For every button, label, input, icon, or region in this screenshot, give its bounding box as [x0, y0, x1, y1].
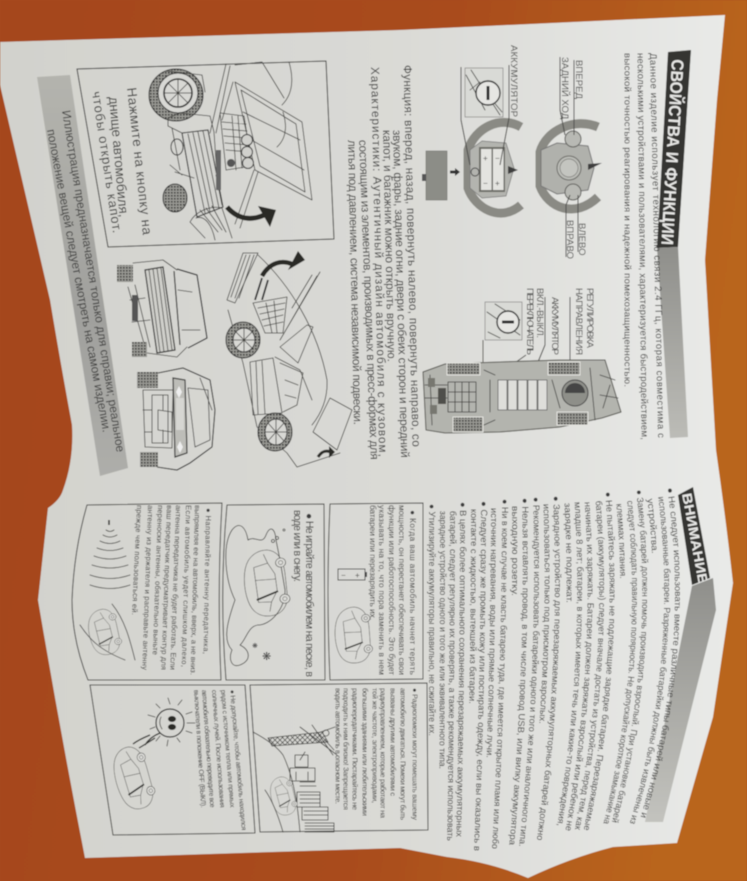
icon: battery — [338, 569, 367, 580]
icon: snowflakes — [252, 529, 285, 663]
main functions and characteristics text: капот, и багажник можно открыть вручную. — [380, 130, 399, 362]
diagram: controller battery compartment: + — [495, 179, 500, 188]
panel text: ● Направляйте антенну передатчика, — [201, 508, 213, 654]
label: battery: АККУМУЛЯТОР — [508, 45, 519, 117]
labels: car underside controls — [512, 288, 595, 365]
warning heading: ВНИМАНИЕ — [679, 492, 711, 585]
panel text: переноски антенны, обязательно выньте — [151, 505, 165, 655]
panel text: автомобилю двигаться. Помехи могут быть — [398, 688, 408, 820]
panel text: той же частоте, электроприводами, — [370, 688, 380, 803]
heading grey extension bar — [657, 247, 688, 438]
warning list text: использоваться только под присмотром взрослых. — [539, 504, 550, 724]
intro paragraph: Данное изделие использует технологию связи 2.4 ГГц, которая совместима с — [647, 53, 666, 438]
arrows: sun rays — [133, 733, 160, 748]
warning list text: клеммах питания. — [616, 504, 626, 578]
labels: left and right — [564, 195, 587, 259]
inset: car power switch — [483, 302, 522, 362]
warning list text: ● Ни в коем случае не класть батарею туда, где имеется открытое пламя или любой — [492, 499, 509, 849]
icon: car — [332, 605, 374, 665]
panel text: антенну из держателя и расправьте антенну — [140, 505, 155, 670]
warning list text: ● Замену батарей должен помочь производить взрослый. При установке батарей — [612, 490, 649, 824]
panel text: воде или в снегу. — [291, 510, 303, 582]
panel: keep away from heat and sun — [90, 685, 255, 835]
panel text — [291, 510, 315, 677]
intro paragraph: несколькими устройствами и пользователями, характеризуется быстродействием, — [635, 53, 650, 440]
heading: features and functions: СВОЙСТВА И ФУНКЦИИ — [657, 59, 687, 246]
icon: radio waves — [90, 520, 130, 588]
panel text: выпрямляя ее на автомобиль, вверх, а не вниз. — [189, 505, 202, 675]
labels: car underside controls: ВКЛ.-ВЫКЛ. — [534, 288, 545, 338]
panel: do not play on sand water snow — [223, 504, 325, 680]
panel text — [130, 505, 213, 675]
diagram: controller battery compartment: − — [483, 179, 488, 188]
labels: car underside controls: РЕГУЛИРОВКА — [584, 288, 595, 349]
main functions and characteristics text: звуком, фары, задние огни, двери с обеих сторон и передний — [390, 130, 412, 458]
car in puddle — [240, 547, 293, 619]
warning list text: начинать их заряжать. Батареи должен заряжать взрослый или ребенок не — [565, 502, 594, 832]
diagram: car underside with batteries — [423, 360, 621, 433]
hand drawing — [190, 206, 232, 240]
main functions and characteristics text: Характеристики: Аутентичный дизайн автомобиля с кузовом, — [368, 67, 390, 457]
main functions and characteristics text — [345, 65, 424, 460]
panel text: выключатели в положение OFF (ВЫКЛ). — [192, 690, 206, 808]
diagram: controller battery compartment: − — [495, 154, 500, 163]
panel text: ● Радиопомехи могут помешать вашему — [410, 688, 420, 820]
warning list text: устройства. — [645, 498, 658, 554]
instruction text: днище автомобиля, — [106, 96, 132, 218]
warning list text: ● Не следует использовать вместе различные типы батарей или новые и — [640, 488, 680, 818]
arrow: trunk lifted — [318, 446, 335, 458]
warning list text: зарядке не подлежат. — [562, 502, 572, 602]
panel: battery replacement warning — [328, 503, 423, 680]
engine parts — [216, 113, 254, 190]
panel text — [368, 505, 418, 675]
icon: transmission tower — [268, 725, 337, 755]
warning list text: зарядное устройство одного и того же или эквивалентного типа. — [438, 510, 448, 769]
icon: snowflakes: ❋ — [262, 651, 271, 663]
diagram: car with hood doors and trunk open — [226, 251, 352, 467]
labels: car underside controls: ПЕРЕКЛЮЧАТЕЛЬ — [524, 288, 535, 355]
arrow: lift hood — [227, 206, 276, 227]
panel text: автомобиля обязательно переведите все — [200, 690, 216, 808]
open hood and engine drawing — [168, 62, 312, 228]
warning list text: батареи (аккумуляторы) следует вначале достать из устройства, перед тем, как — [574, 500, 606, 830]
labels: forward and reverse — [559, 57, 584, 135]
warning list text: ● В целях более оптимального сохранения перезаряжаемых аккумуляторных — [454, 502, 467, 837]
icon: city buildings — [290, 752, 334, 832]
warning list text: выходную розетку. — [510, 506, 518, 596]
panel text: прежде чем пользоваться ей. — [130, 505, 144, 615]
panel text: указывать на то, что пора заменить в нем — [377, 505, 387, 675]
icon: battery: − — [341, 571, 346, 580]
panel text: ● Когда ваш автомобиль начнет терять — [408, 510, 418, 675]
panel text: ваш передатчик предусматривает контур для — [159, 505, 174, 670]
warning list text: младше 8 лет; батареи, в которых имеется течь или какие-то повреждения, — [556, 502, 584, 826]
panel text: солнечных лучей. После использования — [210, 690, 226, 808]
main functions and characteristics text: состоящим из элементов, производимых в пресс-формах для — [356, 140, 382, 460]
labels: car underside controls: АККУМУЛЯТОР — [549, 297, 560, 355]
labels: left and right: ВЛЕВО — [576, 223, 587, 256]
wheel drawing — [149, 69, 205, 121]
panel text — [334, 688, 420, 820]
warning list text: ● Зарядное устройство для перезаряжаемых аккумуляторных батарей должно — [536, 496, 562, 840]
panel: antenna direction — [72, 503, 222, 680]
puddle outline — [226, 525, 285, 666]
panel text: рядом с источником тепла или прямых — [219, 690, 235, 808]
instruction text — [89, 87, 155, 236]
main functions and characteristics text: литья под давлением, система независимой подвески. — [345, 140, 365, 425]
battery cover with arrow — [422, 151, 460, 200]
diagram: controller battery compartment — [468, 122, 521, 213]
ground curve — [253, 732, 300, 832]
warning heading grey extension bar — [645, 578, 716, 822]
arrow: hood lifted — [262, 251, 305, 276]
panel text: вызваны другими автомобилями с — [388, 688, 398, 796]
panel text: радиопередатчиками. Постарайтесь не — [350, 688, 360, 810]
label: battery — [500, 45, 519, 165]
panel text: функции или работоспособность. Это будет — [387, 505, 397, 675]
car on road — [84, 606, 125, 658]
labels: forward and reverse: ЗАДНИЙ ХОД — [559, 57, 571, 120]
labels: left and right: ВПРАВО — [564, 220, 575, 259]
main functions and characteristics text: Функция: вперед, назад, повернуть налево, повернуть направо, со — [401, 65, 424, 447]
car near tower — [266, 774, 300, 818]
warning list text: следует соблюдать правильную полярность. Не допускайте короткое замыкание на — [603, 500, 638, 824]
panel text: ● Не допускайте, чтобы автомобиль находился — [228, 689, 248, 831]
road curves — [80, 604, 135, 660]
icon: snowflakes: ❋ — [252, 642, 258, 650]
diagram: controller front — [540, 124, 602, 209]
inset: power switch on controller — [461, 67, 503, 165]
intro paragraph — [622, 53, 666, 440]
labels: forward and reverse: ВПЕРЕД — [573, 60, 584, 99]
panel text: подходить к ним близко! Запрещается — [342, 688, 350, 810]
panel text: водить автомобиль в опасном месте. — [334, 688, 342, 804]
warning list text: батарей, следует регулярно их проверять, а также рекомендуется использовать — [446, 510, 458, 841]
grey disclaimer bar — [37, 75, 128, 476]
panel text: радиоуправлением, которые работают на — [378, 688, 388, 818]
panel text — [192, 689, 248, 831]
grey disclaimer bar: Иллюстрация предназначается только для справки; реальное — [59, 109, 128, 453]
icon: sun — [148, 698, 195, 746]
grey disclaimer bar: положение вещей следует смотреть на самом изделии. — [44, 128, 114, 433]
panel: press button under car to open hood — [77, 61, 334, 247]
intro paragraph: высокой точностью реагирования и надежной помехозащищенностью. — [622, 53, 632, 387]
panel text: ● Не играйте автомобилем на песке, в — [303, 513, 315, 677]
panel text: батареи или перезарядить их. — [368, 505, 378, 620]
warning list text: ● Рекомендуется использовать батарейки одного и того же или аналогичного типа. — [518, 497, 540, 846]
instruction text: Нажмите на кнопку на — [124, 87, 155, 236]
car in sun — [107, 743, 159, 813]
panel text: большими зданиями или любительскими — [360, 688, 370, 816]
diagram: front view open — [137, 368, 215, 470]
panel text: Если автомобиль уедет слишком далеко, — [180, 505, 193, 667]
instruction text: чтобы открыть капот. — [89, 90, 125, 234]
warning list text: ● Следует сразу же промыть кожу или постирать одежду, если вы оказались в — [474, 501, 488, 851]
warning list text: источник нагревания, воды или прямые солнечные лучи. — [484, 508, 496, 758]
warning list text: использованные батареи. Разряженные батарейки должны быть извлечены из — [630, 496, 671, 824]
diagram: front view closed — [117, 260, 207, 357]
panel text: антенна передатчика не будет работать. Если — [168, 505, 183, 670]
warning list text: ● Утилизируйте аккумуляторы правильно, не сжигайте их. — [426, 504, 436, 736]
icon: battery: + — [355, 571, 360, 580]
panel text: мощность, он перестанет обеспечивать свои — [397, 505, 407, 675]
labels: car underside controls: НАПРАВЛЕНИЯ — [573, 288, 584, 355]
diagram: controller battery compartment: + — [483, 154, 488, 163]
warning list text: ● Нельзя вставлять провод, в том числе провод USB, или вилку аккумулятора в — [508, 498, 529, 846]
warning list text: ● Не пытайтесь заряжать не подлежащие зарядке батареи. Перезаряжаемые — [584, 492, 616, 831]
panel: radio interference — [250, 683, 428, 832]
warning list text: контакте с жидкостью, вытекшей из батареи. — [467, 509, 478, 704]
